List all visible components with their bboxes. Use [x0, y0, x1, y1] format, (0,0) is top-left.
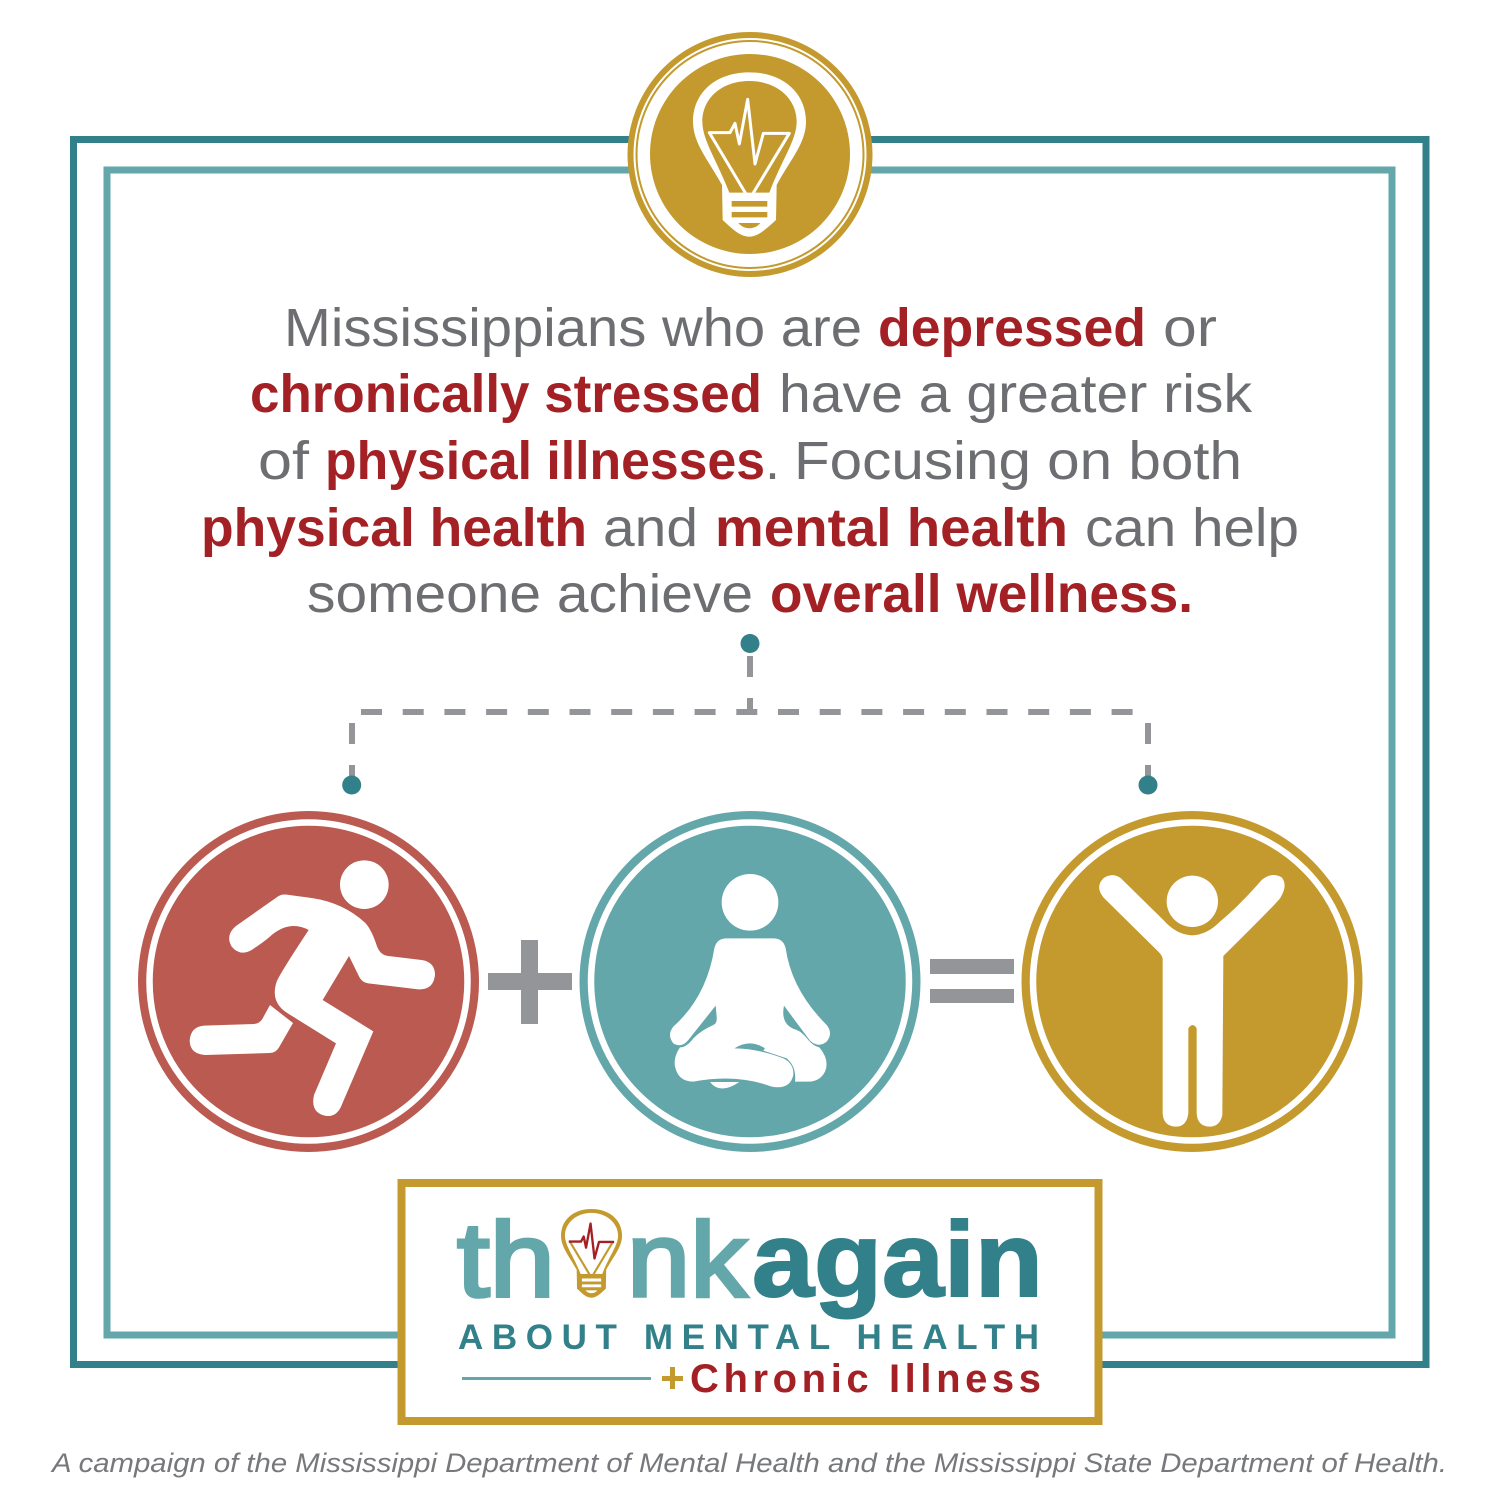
logo rule	[462, 1377, 651, 1380]
logo chronic illness: Chronic Illness	[690, 1357, 1041, 1401]
text block: main message: Mississippians who are	[284, 298, 862, 358]
logo wordmark: nk: nk	[627, 1201, 748, 1319]
text block: main message: and	[603, 498, 698, 558]
logo plus	[662, 1367, 683, 1389]
panel: double frame	[74, 140, 1426, 1364]
logo subtitle: ABOUT MENTAL HEALTH	[458, 1318, 1039, 1357]
icon: raised arms figure circle	[1022, 811, 1362, 1152]
text block: main message	[201, 298, 1299, 624]
text block: main message: overall wellness.	[770, 564, 1193, 624]
text block: main message: depressed	[878, 298, 1146, 358]
icon: equals sign	[930, 959, 1014, 1003]
icon: runner circle	[138, 811, 479, 1152]
text block: main message: or	[1163, 298, 1217, 358]
logo wordmark: again: again	[752, 1201, 1043, 1319]
text block: main message: Focusing on both	[794, 431, 1242, 491]
text block: main message: someone achieve	[307, 564, 753, 624]
text block: main message: mental health	[715, 498, 1068, 558]
icon: light bulb badge	[630, 35, 870, 274]
text block: main message: physical health	[201, 498, 587, 558]
text block: main message: chronically stressed	[250, 364, 762, 424]
logo icon: bulb	[561, 1209, 622, 1298]
logo: think again box	[402, 1183, 1098, 1421]
icon: plus sign	[488, 940, 572, 1024]
text block: main message: of	[258, 431, 310, 491]
text block: main message: physical illnesses	[325, 431, 765, 491]
text block: main message: .	[765, 431, 780, 491]
logo wordmark: th: th	[457, 1201, 555, 1319]
icon: meditation circle	[580, 811, 920, 1152]
text block: main message: can help	[1085, 498, 1299, 558]
caption: A campaign of the Mississippi Department of Mental Health and the Mississippi State Department of Health.	[50, 1448, 1447, 1478]
diagram: dashed connector	[342, 634, 1158, 794]
text block: main message: have a greater risk	[779, 364, 1253, 424]
